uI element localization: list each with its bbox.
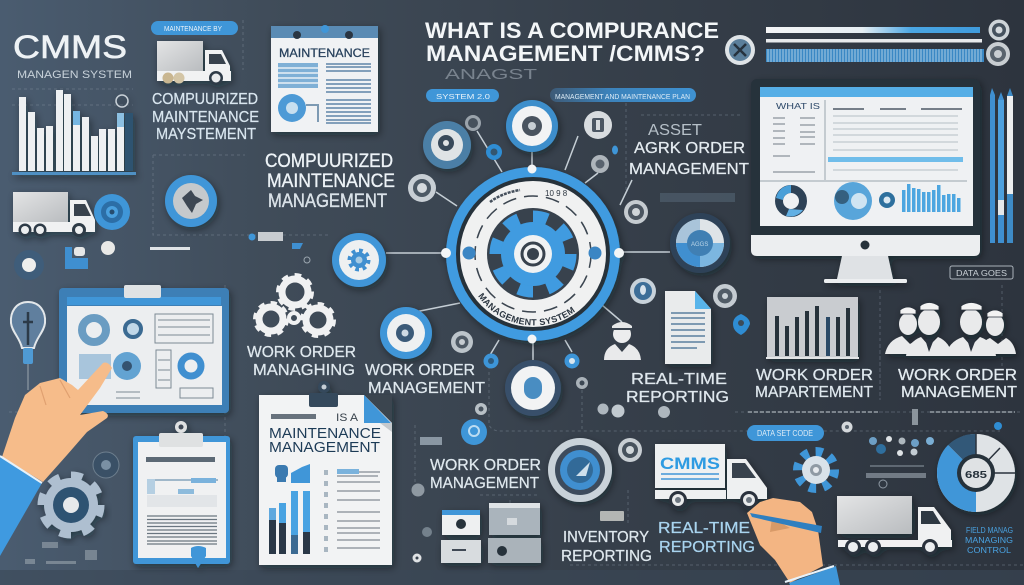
text: asset work order management: MANAGEMENT: [629, 161, 749, 178]
text: work order management lower: [430, 457, 541, 492]
text: work order management lower: WORK ORDER: [430, 457, 541, 474]
dashboard table: [116, 314, 213, 398]
computer monitor dashboard: [751, 79, 980, 283]
title: [425, 18, 719, 66]
satellite icon: bottom: [505, 360, 561, 416]
blue caption: lower right: FIELD MANAG: [966, 526, 1013, 535]
text: work order mapartement: [755, 367, 873, 401]
right top progress bars: [766, 27, 984, 62]
blue caption: lower right: MANAGING: [965, 536, 1013, 545]
text: real-time reporting center: REAL-TIME: [631, 371, 727, 388]
text: computerized maintenance 1: COMPUURIZED: [152, 91, 258, 108]
icon: technician: [604, 322, 641, 360]
text: work order management right: [898, 367, 1017, 401]
satellite icon: left gear: [332, 233, 386, 287]
text: work order management right: WORK ORDER: [898, 367, 1017, 384]
satellite icon: upper left: [423, 121, 471, 169]
text: work order mapartement: MAPARTEMENT: [755, 384, 873, 401]
hub ring text: MANAGEMENT SYSTEM: [478, 292, 575, 326]
text: real-time reporting center: REPORTING: [626, 389, 729, 406]
CMMS delivery truck: [655, 444, 767, 509]
satellite icon: lower left: [380, 307, 432, 359]
pie center value: 685: [965, 470, 988, 481]
text: real-time reporting lower: REAL-TIME: [658, 520, 750, 537]
icon: inventory drawers: [441, 503, 541, 563]
report headline: IS A: [336, 412, 359, 424]
icon cluster: small dots: [866, 436, 934, 488]
satellite icon: top: [506, 100, 558, 152]
small marks above right pill: [748, 409, 1015, 432]
icon: writing hand with pen: [747, 498, 840, 585]
pill label: maintenance: MAINTENANCE BY: [164, 26, 222, 33]
donut dial: AGGS: [691, 242, 708, 248]
text: real-time reporting center: [626, 371, 729, 406]
text: work order management center left: [365, 362, 485, 397]
text: computerized maintenance 1: [152, 91, 259, 143]
pill label: right: [747, 425, 824, 441]
title: MANAGEMENT /CMMS?: [426, 41, 705, 66]
text: computerized maintenance 2: [265, 151, 395, 212]
icon: team of workers: [885, 302, 1016, 356]
blue caption: lower right: [965, 526, 1013, 555]
text: computerized maintenance 1: MAYSTEMENT: [156, 126, 256, 143]
faded subtitle: ANAGST: [445, 66, 537, 83]
text: work order management center left: WORK ORDER: [365, 362, 475, 379]
dashboard rings: [79, 318, 201, 380]
title: WHAT IS A COMPURANCE: [425, 18, 719, 43]
panel: dashboard clipboard: [59, 285, 229, 413]
text: work order managing: MANAGHING: [253, 362, 355, 379]
small blue badge: [461, 419, 487, 445]
central gear hub: [440, 164, 630, 350]
text: work order management lower: MANAGEMENT: [430, 475, 539, 492]
bar chart: top left: [12, 90, 136, 175]
badge: bottom center: [548, 438, 612, 502]
screen gear blobs: [834, 182, 895, 220]
icon: delivery truck top: [157, 41, 231, 85]
panel: clipboard report: [133, 421, 230, 568]
icon: large steel gear: [42, 476, 100, 534]
truck logo: CMMS: [660, 454, 720, 473]
central gear hub: 10 9 8: [545, 189, 568, 198]
vertical pencils: [990, 88, 1013, 243]
chart: white panel bars: [766, 297, 859, 359]
pie chart: [937, 434, 1015, 512]
hub gear: [496, 217, 570, 291]
text: computerized maintenance 2: MAINTENANCE: [267, 171, 395, 192]
text: real-time reporting lower: [658, 520, 755, 556]
brand subtitle: MANAGEN SYSTEM: [17, 69, 132, 81]
pill labels under title: [426, 88, 696, 102]
screen donut chart: [776, 185, 803, 217]
screen table: [760, 100, 967, 181]
screen heading: WHAT IS: [776, 101, 820, 111]
text: computerized maintenance 1: MAINTENANCE: [152, 109, 259, 126]
text: asset work order management: AGRK ORDER: [634, 140, 745, 157]
icon: white gears cluster: [255, 275, 334, 336]
pill label: maintenance: [151, 21, 238, 35]
icon: blue swirl: [94, 194, 130, 230]
screen bar chart: [902, 184, 960, 212]
report headline: MANAGEMENT: [269, 439, 380, 456]
report bar chart: [269, 491, 310, 554]
pill label: right: DATA SET CODE: [757, 429, 813, 438]
outlined label: DATA GOES: [956, 269, 1007, 278]
text: asset work order management: [629, 122, 749, 178]
report headline: [269, 412, 381, 456]
outlined label: [950, 266, 1013, 279]
text: asset work order management: ASSET: [648, 122, 702, 139]
small parts beside drawers: [412, 437, 624, 562]
text: work order managing: WORK ORDER: [247, 344, 356, 361]
panel: maintenance calendar document: [271, 25, 378, 132]
text: inventory reporting: [561, 529, 652, 565]
icon: propeller badge: [165, 175, 217, 227]
CMMS wordmark: CMMS: [13, 29, 127, 65]
small bits: mid left: [14, 232, 310, 280]
report text lines: [337, 472, 380, 548]
text: inventory reporting: REPORTING: [561, 548, 652, 565]
small ring icons around hub: [408, 111, 750, 418]
text: work order mapartement: WORK ORDER: [756, 367, 873, 384]
brand block: CMMS: [13, 29, 132, 81]
small dim marks bottom left: [25, 542, 97, 564]
text: computerized maintenance 2: COMPUURIZED: [265, 151, 393, 172]
icon: document: [665, 291, 711, 364]
blue caption: lower right: CONTROL: [967, 546, 1012, 555]
text: computerized maintenance 2: MANAGEMENT: [268, 191, 387, 212]
text: work order management right: MANAGEMENT: [901, 384, 1017, 401]
pill labels under title: MANAGEMENT AND MAINTENANCE PLAN: [555, 94, 690, 101]
small ring badge: [618, 438, 642, 462]
report headline: MAINTENANCE: [269, 425, 381, 442]
text: work order management center left: MANAGEMENT: [368, 380, 485, 397]
text: work order managing: [247, 344, 356, 379]
text: inventory reporting: INVENTORY: [563, 529, 649, 546]
icon: truck lower right: [837, 496, 952, 555]
icon: blue white gear: [798, 452, 834, 488]
connector spokes: [386, 131, 670, 360]
donut dial: [670, 213, 730, 273]
pill labels under title: SYSTEM 2.0: [436, 94, 490, 101]
icon: pointing hand: [0, 363, 112, 556]
right top ring icons: [725, 20, 1010, 66]
text: real-time reporting lower: REPORTING: [659, 539, 755, 556]
panel: maintenance management report: [259, 381, 392, 565]
hub node dots: [441, 164, 624, 344]
small badge near gear: [93, 452, 119, 478]
icon: delivery truck mid left: [13, 192, 95, 237]
report icons: [275, 464, 310, 483]
document heading: MAINTENANCE: [279, 46, 370, 60]
icon: light bulb: [11, 302, 45, 390]
